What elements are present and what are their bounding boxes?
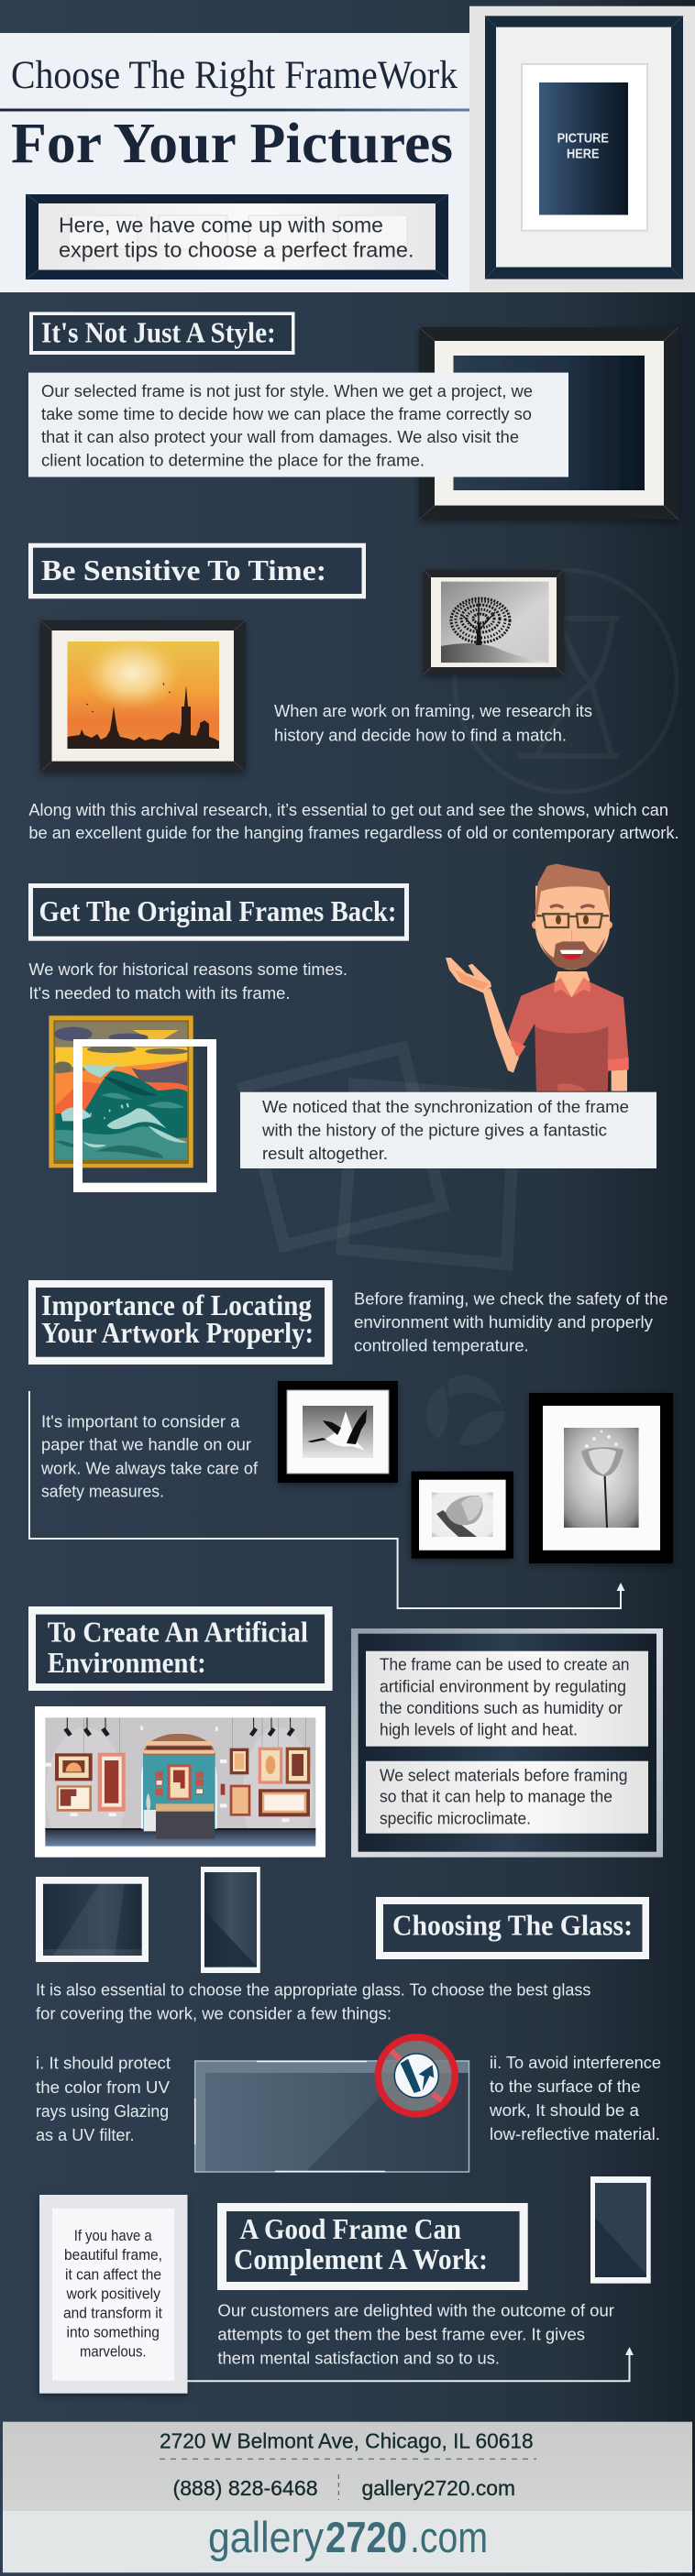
- text card: synchronization: with the history of the picture gives a fantastic: [261, 1120, 607, 1139]
- section: it's not just a style: [28, 312, 678, 520]
- intro framed text: Here, we have come up with some: [59, 213, 383, 236]
- tree picture in frame: [424, 570, 564, 674]
- section: choosing the glass: [36, 1867, 661, 2172]
- text: customers delighted: attempts to get them the best frame ever. It gives: [217, 2324, 585, 2343]
- text: point two: [489, 2053, 661, 2143]
- framed quote: [39, 2195, 187, 2394]
- section: importance of locating: [28, 1280, 673, 1608]
- text: point two: to the surface of the: [490, 2077, 641, 2096]
- text: research history: history and decide how to find a match.: [274, 725, 567, 744]
- hero picture frame panel: [469, 6, 695, 292]
- text: customers delighted: Our customers are delighted with the outcome of our: [217, 2300, 614, 2319]
- text card: take some time to decide how we can place the frame correctly so: [41, 404, 532, 423]
- section: get the original frames back: [28, 864, 656, 1264]
- picture: stormy wave painting: [49, 1015, 193, 1167]
- heading: To Create An Artificial: [48, 1616, 308, 1649]
- text: customers delighted: [217, 2300, 614, 2367]
- framed quote: beautiful frame,: [64, 2247, 162, 2264]
- text: appropriate glass: for covering the work, we consider a few things:: [36, 2003, 392, 2022]
- note one: artificial environment by regulating: [380, 1677, 626, 1696]
- arrow: connector to frames: [29, 1391, 625, 1608]
- icon: leaf watermark: [425, 1375, 505, 1445]
- text card: synchronization: We noticed that the synchronization of the frame: [262, 1097, 629, 1116]
- text with connector: It's important to consider a: [41, 1412, 240, 1431]
- glass sample frame: [590, 2176, 651, 2284]
- framed quote: and transform it: [63, 2305, 162, 2321]
- text: point one: the color from UV: [36, 2077, 171, 2097]
- text: safety of environment: environment with humidity and properly: [354, 1312, 654, 1332]
- text: safety of environment: [354, 1288, 667, 1354]
- text: historical reasons: We work for historical reasons some times.: [28, 959, 348, 979]
- picture: stork in black frame: [278, 1381, 398, 1483]
- text: archival research: [28, 800, 679, 842]
- framed quote: it can affect the: [65, 2266, 161, 2283]
- contact band: (888) 828-6468: [172, 2476, 318, 2500]
- note one: [366, 1651, 648, 1747]
- icon: tilted frames watermark: [244, 1047, 515, 1264]
- note one: The frame can be used to create an: [380, 1655, 629, 1674]
- heading: Your Artwork Properly:: [41, 1316, 314, 1349]
- white empty frame overlay: [73, 1039, 216, 1192]
- framed quote: marvelous.: [80, 2344, 147, 2361]
- note two: [366, 1761, 648, 1834]
- picture placeholder label: [557, 130, 609, 161]
- section: be sensitive to time: [28, 543, 679, 842]
- text: research history: [274, 701, 592, 744]
- illustration: man presenting: [446, 864, 629, 1091]
- website band: 2720: [325, 2513, 407, 2561]
- text: archival research: be an excellent guide for the hanging frames regardless of old or contemporary artwork.: [28, 823, 679, 842]
- heading: Get The Original Frames Back:: [39, 894, 396, 927]
- note two: so that it can help to manage the: [380, 1787, 612, 1806]
- text: safety of environment: controlled temperature.: [354, 1335, 529, 1354]
- text: point two: low-reflective material.: [490, 2124, 660, 2143]
- note one: the conditions such as humidity or: [380, 1698, 623, 1717]
- panel: artificial environment notes: [351, 1628, 663, 1858]
- footer: [3, 2422, 692, 2572]
- glass sample frame tall: [201, 1867, 260, 1973]
- title line one: Choose The Right FrameWork: [11, 54, 458, 97]
- note one: high levels of light and heat.: [380, 1720, 578, 1739]
- text card: client location to determine the place for the frame.: [41, 451, 425, 470]
- heading: [28, 1280, 333, 1365]
- framed quote: If you have a: [74, 2228, 152, 2244]
- website band: gallery: [208, 2513, 324, 2561]
- contact band: gallery2720.com: [361, 2476, 515, 2500]
- sunset picture in frame: [40, 620, 246, 773]
- website band: .com: [410, 2513, 488, 2561]
- text: safety of environment: Before framing, we check the safety of the: [354, 1288, 667, 1308]
- text: point one: rays using Glazing: [36, 2101, 169, 2121]
- picture: gallery interior: [35, 1706, 325, 1862]
- heading: [376, 1897, 649, 1959]
- framed quote: work positively: [66, 2286, 161, 2302]
- glass pane illustration: [195, 2061, 469, 2172]
- text: research history: When are work on framing, we research its: [274, 701, 592, 720]
- heading: Choosing The Glass:: [392, 1909, 633, 1942]
- website band: [3, 2511, 692, 2572]
- text with connector: paper that we handle on our: [41, 1435, 251, 1454]
- text: point one: as a UV filter.: [36, 2125, 134, 2144]
- heading: [217, 2203, 528, 2290]
- note two: We select materials before framing: [380, 1765, 627, 1784]
- text: archival research: Along with this archival research, it’s essential to get out and see the shows, which can: [28, 800, 668, 819]
- text card: [28, 373, 568, 477]
- text: appropriate glass: [36, 1979, 590, 2022]
- heading: [28, 543, 366, 598]
- text: historical reasons: It's needed to match with its frame.: [28, 983, 291, 1003]
- arrow: connector: [187, 2347, 634, 2381]
- heading: Be Sensitive To Time:: [41, 554, 326, 586]
- intro framed text: [26, 194, 448, 280]
- intro framed text: expert tips to choose a perfect frame.: [59, 238, 414, 262]
- text: customers delighted: them mental satisfaction and so to us.: [217, 2348, 500, 2367]
- contact band: 2720 W Belmont Ave, Chicago, IL 60618: [160, 2429, 534, 2453]
- text: point one: [36, 2054, 171, 2144]
- heading: [28, 1606, 333, 1691]
- text: appropriate glass: It is also essential to choose the appropriate glass. To choose the best glass: [36, 1979, 590, 1999]
- section: artificial environment: [28, 1606, 663, 1862]
- framed quote: into something: [66, 2325, 160, 2341]
- text with connector: [29, 1391, 625, 1608]
- heading: It's Not Just A Style:: [41, 316, 276, 349]
- heading: A Good Frame Can: [240, 2212, 461, 2245]
- contact band: [3, 2422, 692, 2511]
- heading: [28, 883, 409, 941]
- picture placeholder label: HERE: [567, 147, 600, 161]
- text: point two: ii. To avoid interference: [490, 2053, 661, 2072]
- text card: synchronization: result altogether.: [262, 1144, 388, 1163]
- picture: flower in black frame: [529, 1393, 673, 1563]
- text: historical reasons: [28, 959, 348, 1003]
- title line two: For Your Pictures: [11, 113, 453, 175]
- icon: hourglass watermark: [455, 570, 677, 792]
- text with connector: work. We always take care of: [40, 1458, 259, 1477]
- frame illustration: [419, 327, 678, 520]
- text card: synchronization: [240, 1092, 656, 1168]
- heading: Complement A Work:: [234, 2242, 488, 2275]
- glass sample frame square: [36, 1877, 149, 1962]
- heading: Importance of Locating: [41, 1288, 312, 1321]
- hero band: [0, 33, 469, 292]
- text: point one: i. It should protect: [36, 2054, 171, 2073]
- icon: logo badge: [378, 2037, 455, 2114]
- section: a good frame can complement: [39, 2176, 651, 2394]
- divider rule: [0, 108, 469, 112]
- text: point two: work, It should be a: [489, 2100, 640, 2120]
- note two: specific microclimate.: [380, 1809, 531, 1828]
- heading: Environment:: [48, 1646, 206, 1679]
- picture placeholder label: PICTURE: [557, 130, 609, 147]
- picture: tulip in black frame: [412, 1472, 513, 1559]
- text card: Our selected frame is not just for style. When we get a project, we: [41, 381, 533, 400]
- text with connector: safety measures.: [41, 1482, 164, 1501]
- text card: that it can also protect your wall from damages. We also visit the: [41, 427, 519, 446]
